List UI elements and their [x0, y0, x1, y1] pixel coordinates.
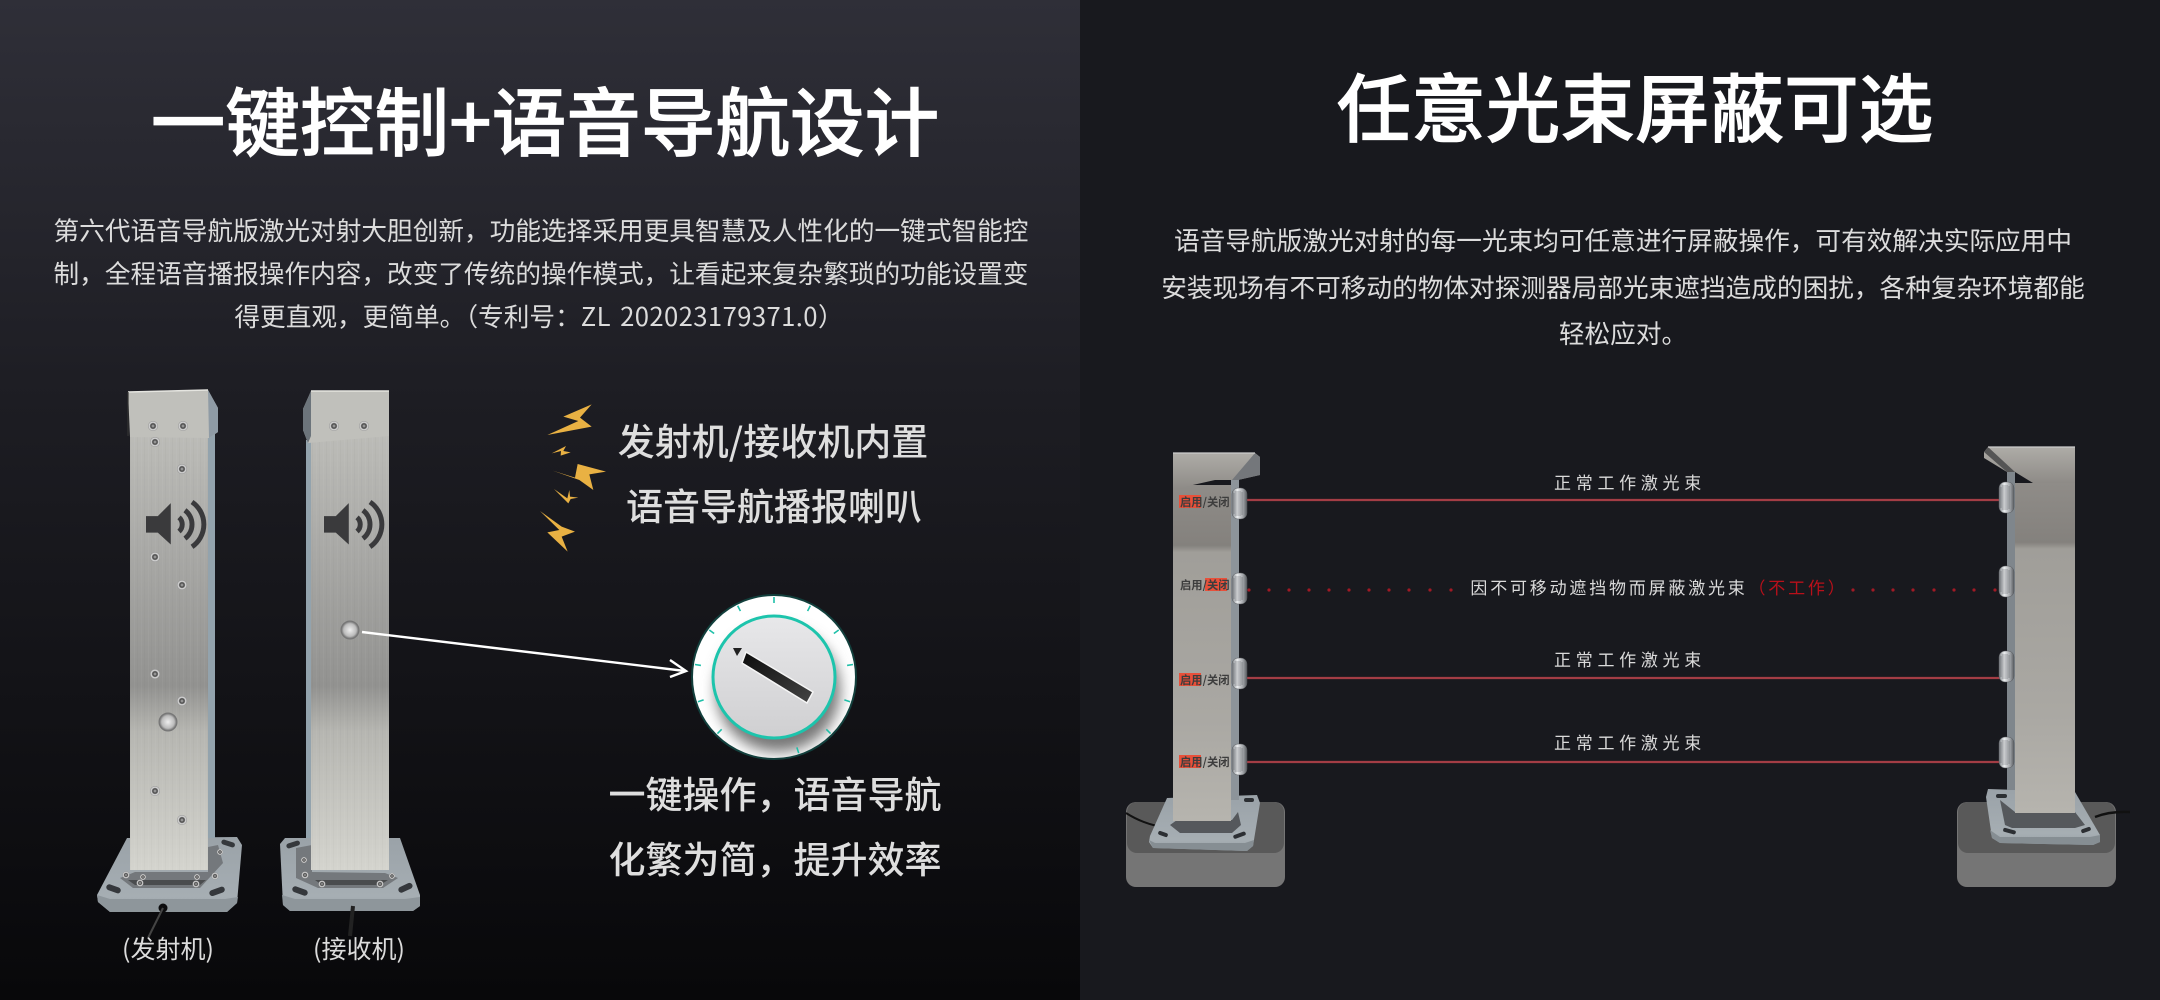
side strip [2007, 472, 2015, 790]
text block: left description: 第六代语音导航版激光对射大胆创新，功能选择采用更具智慧及人性化的一键式智能控 [54, 211, 1028, 248]
beam label 4: 正常工作激光束 [1554, 729, 1706, 754]
front face [2015, 483, 2075, 813]
base plate [1986, 789, 2100, 845]
tick marks [695, 597, 853, 753]
side strip [1231, 478, 1239, 800]
small base screws [301, 857, 395, 888]
label: receiver: (接收机) [313, 930, 405, 966]
knob [713, 616, 835, 738]
callout: one-key operation [608, 765, 942, 884]
text block: left description [54, 211, 1028, 334]
title: selectable beam masking: 任意光束屏蔽可选 [1337, 50, 1933, 158]
arrow: button to dial [362, 632, 686, 677]
icon: one-key dial [692, 595, 856, 759]
pointer [733, 648, 742, 656]
text block: left description: 制，全程语音播报操作内容，改变了传统的操作模式，让看起来复杂繁琐的功能设置变 [54, 254, 1028, 291]
laser beams [1243, 500, 2000, 762]
switch label 1: 启用/关闭 [1180, 494, 1230, 510]
product: right pole [1984, 447, 2130, 845]
small base screws [122, 849, 223, 888]
panel: left background [0, 0, 1080, 1000]
pedestal: left [1126, 802, 1285, 887]
top cap [1173, 453, 1260, 489]
side strip [208, 434, 215, 838]
cable [2095, 812, 2130, 817]
icon: lightning bolts [540, 404, 606, 552]
product: receiver pole [280, 391, 420, 936]
beam label 1: 正常工作激光束 [1554, 469, 1706, 494]
top cap [1984, 447, 2075, 483]
product: transmitter pole [97, 390, 242, 938]
label: transmitter: (发射机) [122, 930, 214, 966]
text block: right description: 语音导航版激光对射的每一光束均可任意进行屏蔽操作，可有效解决实际应用中 [1174, 221, 2072, 258]
text block: left description: 得更直观，更简单。（专利号：ZL 202023179371.0） [234, 297, 844, 334]
cable [1126, 813, 1157, 826]
screws [148, 421, 188, 825]
product: left pole with switches [1126, 453, 1260, 851]
callout: built-in speaker [618, 412, 928, 531]
beam label 2: masked: 因不可移动遮挡物而屏蔽激光束 [1470, 574, 1748, 599]
knobs [1999, 482, 2014, 768]
knob shadow [716, 628, 840, 752]
pedestal: right [1957, 802, 2116, 887]
side strip [306, 440, 311, 838]
callout: one-key operation: 一键操作，语音导航 [608, 765, 942, 819]
front face [311, 410, 389, 870]
text block: right description: 安装现场有不可移动的物体对探测器局部光束遮挡造成的困扰，各种复杂环境都能 [1161, 268, 2085, 305]
screws [329, 421, 369, 431]
top cap [303, 391, 389, 443]
beam label 3: 正常工作激光束 [1554, 646, 1706, 671]
beam label 2: masked: （不工作） [1748, 574, 1848, 599]
switch label 2: 启用/关闭 [1180, 577, 1230, 593]
front face [130, 410, 208, 870]
icon: speaker [146, 502, 204, 547]
callout: built-in speaker: 语音导航播报喇叭 [626, 477, 922, 531]
icon: speaker [324, 502, 382, 547]
callout: one-key operation: 化繁为简，提升效率 [608, 830, 942, 884]
switch label 3: 启用/关闭 [1180, 672, 1230, 688]
title: one-key control and voice navigation: 一键控制+语音导航设计 [151, 64, 939, 172]
front face [1173, 485, 1231, 821]
base plate [1149, 795, 1260, 851]
switch label 4: 启用/关闭 [1180, 754, 1230, 770]
top cap [128, 390, 218, 438]
masked beam dots [1247, 588, 1997, 592]
knobs [1232, 488, 1247, 775]
callout: built-in speaker: 发射机/接收机内置 [618, 412, 928, 466]
button [159, 713, 177, 731]
panel: right background [1080, 0, 2160, 1000]
slot [742, 652, 813, 703]
base plate [280, 838, 420, 936]
base plate [97, 837, 242, 938]
button [341, 621, 359, 639]
text block: right description [1161, 221, 2085, 351]
text block: right description: 轻松应对。 [1559, 314, 1687, 351]
